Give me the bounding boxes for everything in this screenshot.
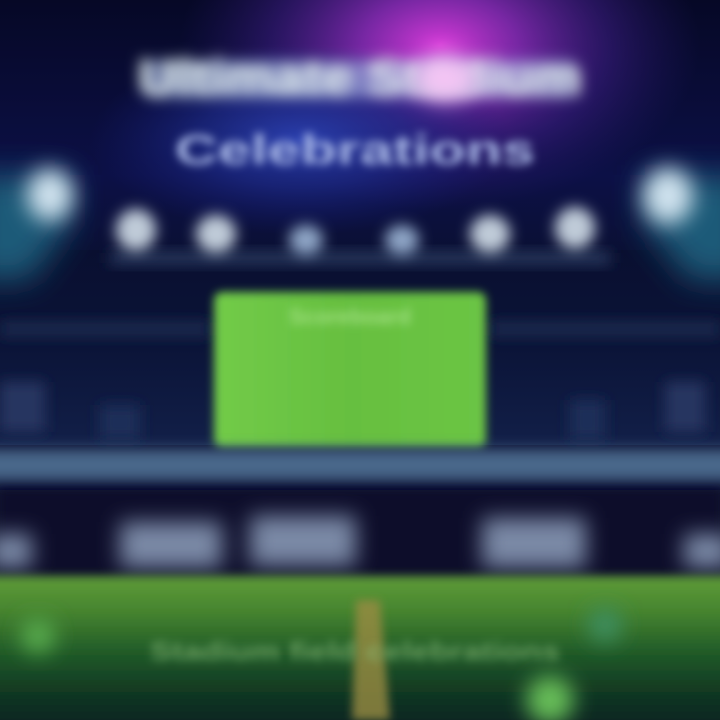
row of lights: [116, 207, 595, 255]
stadium stands: [0, 250, 720, 445]
field glow left: [21, 619, 55, 653]
field caption: Stadium field celebrations: [150, 636, 560, 666]
blue glow: [90, 45, 510, 235]
floodlight right: [643, 168, 693, 224]
title: Ultimate Stadium: [138, 49, 582, 107]
background sky: [0, 0, 720, 270]
lower stands: [0, 490, 720, 580]
field: [0, 576, 720, 720]
stand tiers: [0, 322, 720, 440]
light band under lamps: [110, 252, 610, 264]
subtitle: Celebrations: [175, 126, 535, 173]
floodlight band right: [645, 175, 720, 280]
field glow right: [588, 608, 622, 642]
floodlight band left: [0, 175, 70, 280]
scoreboard caption: Scoreboard: [289, 304, 411, 329]
scoreboard: [214, 292, 486, 448]
concourse band: [0, 449, 720, 481]
title highlight: [415, 56, 475, 100]
centre line: [352, 600, 390, 720]
floodlight left: [27, 169, 73, 221]
field glow bottom: [526, 676, 574, 720]
lower stand blocks: [0, 516, 720, 568]
purple glow: [180, 0, 700, 210]
